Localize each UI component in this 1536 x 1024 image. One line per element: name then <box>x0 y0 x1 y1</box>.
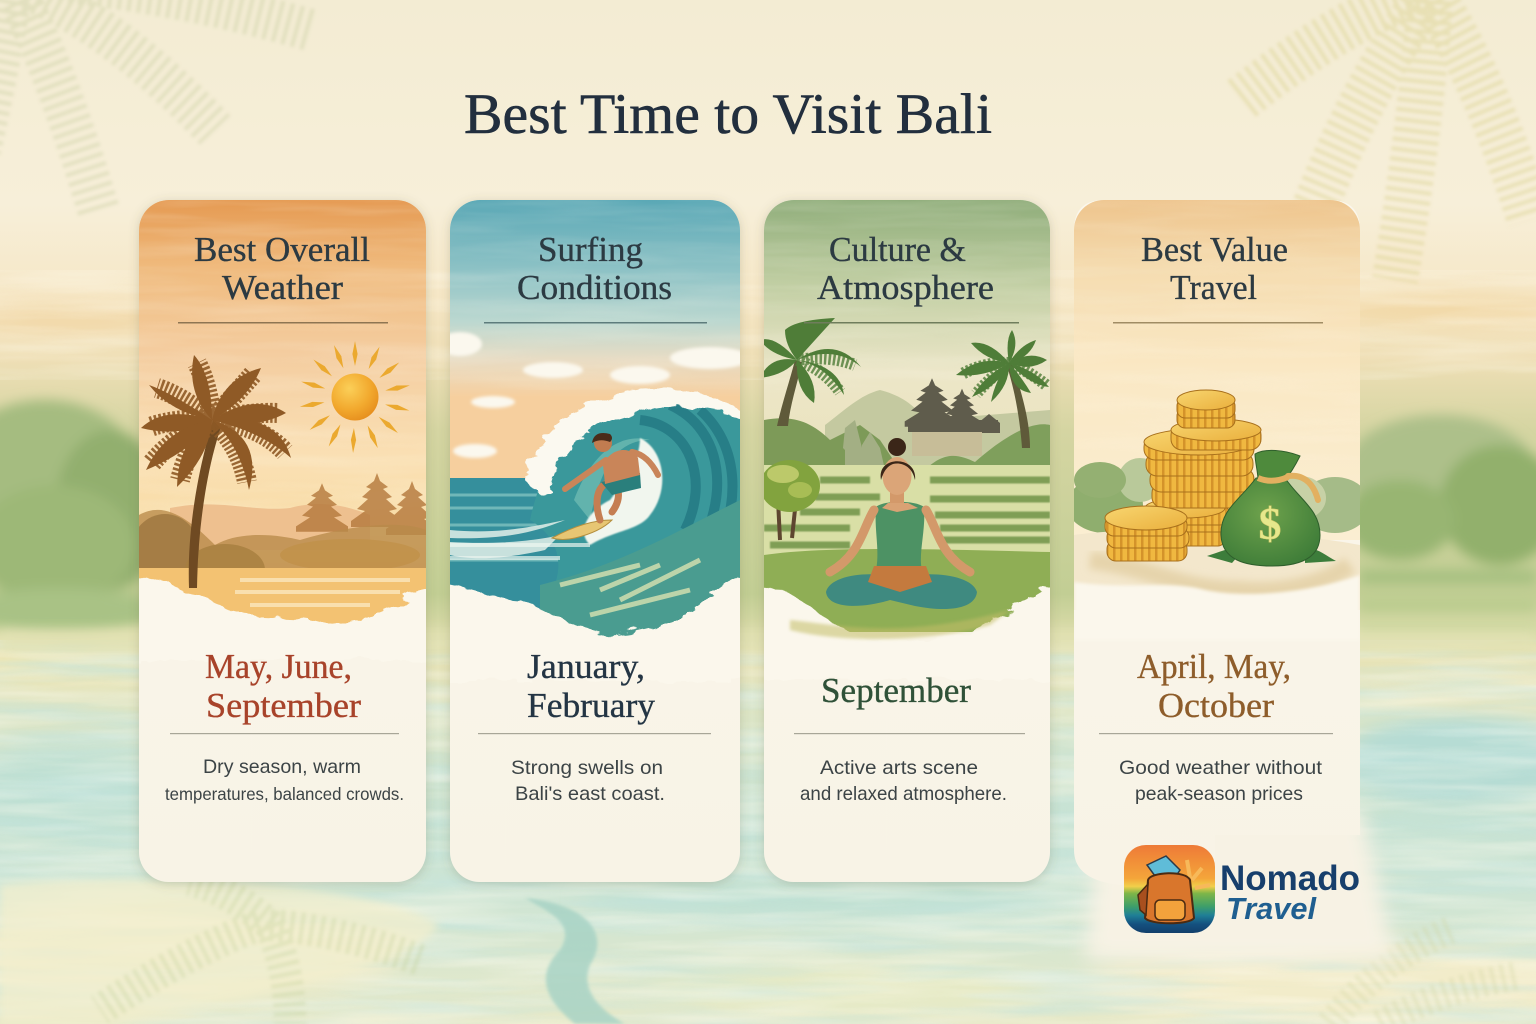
description: Active arts scene <box>820 757 978 779</box>
months: February <box>527 686 655 725</box>
logo: Nomado Travel: Nomado <box>1220 859 1360 898</box>
panel: surfing conditions <box>446 198 744 888</box>
heading: Surfing <box>538 230 643 269</box>
panel: best value travel <box>1067 200 1370 885</box>
heading <box>1141 230 1288 307</box>
description: and relaxed atmosphere. <box>800 783 1007 805</box>
icon: sun <box>299 341 410 453</box>
icon: palm tree <box>141 355 291 588</box>
illustration: ocean wave <box>450 200 740 638</box>
months <box>1137 647 1291 725</box>
months: October <box>1158 686 1274 725</box>
heading: Conditions <box>517 268 672 307</box>
description <box>800 757 1007 805</box>
months: September <box>206 686 361 725</box>
heading: Best Value <box>1141 230 1288 269</box>
icon: palm trees <box>760 318 1049 448</box>
heading <box>194 230 370 307</box>
icon: bush tree <box>760 460 820 540</box>
icon: backpack app tile <box>1124 845 1215 933</box>
description: temperatures, balanced crowds. <box>165 784 404 804</box>
heading: Culture & <box>829 230 966 269</box>
heading <box>817 230 994 307</box>
icon: coin stacks <box>1105 390 1261 561</box>
panel: best overall weather <box>135 198 430 888</box>
heading <box>517 230 672 307</box>
description <box>1119 757 1323 805</box>
description <box>165 756 404 804</box>
illustration: rice terraces and temple <box>764 200 1050 641</box>
illustration: sunset landscape <box>139 200 426 624</box>
heading: Atmosphere <box>817 268 994 307</box>
months: April, May, <box>1137 647 1291 686</box>
icon: money bag: $ <box>1258 498 1282 549</box>
description: Dry season, warm <box>203 756 361 778</box>
icon: money bag <box>1207 450 1336 566</box>
description: Bali's east coast. <box>515 783 665 805</box>
description: Strong swells on <box>511 757 663 779</box>
icon: surfer <box>552 433 658 540</box>
title: Best Time to Visit Bali <box>464 83 992 146</box>
heading: Travel <box>1170 268 1257 307</box>
icon: meditating woman <box>826 438 977 609</box>
months: January, <box>527 647 645 686</box>
description: Good weather without <box>1119 757 1323 779</box>
heading: Best Overall <box>194 230 370 269</box>
description: peak-season prices <box>1135 783 1303 805</box>
months: May, June, <box>205 647 352 686</box>
panel: culture and atmosphere <box>760 198 1054 888</box>
heading: Weather <box>222 268 343 307</box>
logo: Nomado Travel: Travel <box>1226 891 1317 926</box>
month: September <box>821 671 971 710</box>
months <box>527 647 655 725</box>
months <box>205 647 361 725</box>
logo: Nomado Travel <box>1124 845 1360 933</box>
cream ground behind logo <box>1085 810 1395 960</box>
illustration: hazy landscape <box>1074 200 1360 610</box>
description <box>511 757 665 805</box>
